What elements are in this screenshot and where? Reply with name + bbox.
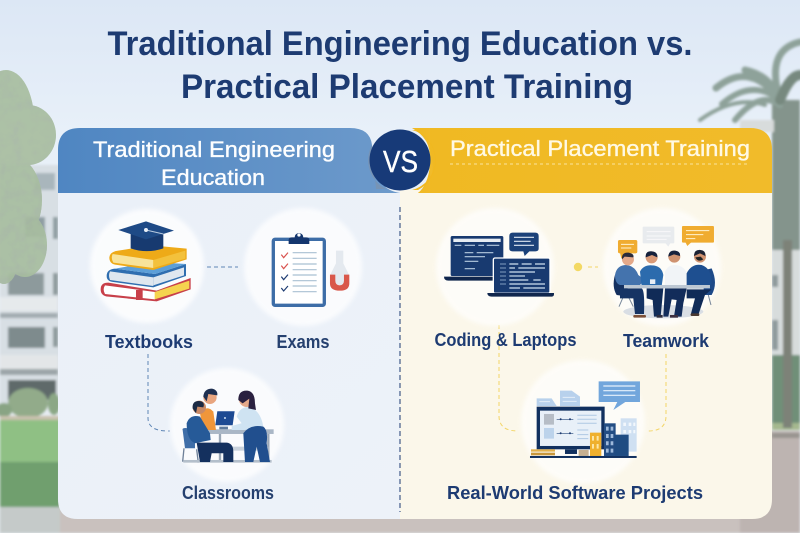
label: classrooms: Classrooms	[182, 483, 274, 503]
header: practical: Practical Placement Training	[450, 136, 750, 161]
icon: classroom group	[170, 368, 284, 482]
header: practical	[400, 128, 772, 193]
icon: coding laptops	[436, 208, 554, 326]
icon connectors: left	[148, 267, 238, 431]
label: exams: Exams	[276, 332, 330, 352]
label: coding and laptops: Coding & Laptops	[434, 330, 576, 350]
title: Practical Placement Training	[181, 68, 633, 106]
label: real-world software projects: Real-World Software Projects	[447, 483, 703, 503]
header: traditional	[58, 128, 400, 193]
label: teamwork: Teamwork	[623, 331, 710, 351]
panel: practical placement training	[400, 128, 772, 519]
icon: textbooks	[90, 209, 204, 323]
panel: traditional engineering education	[58, 128, 400, 519]
vs badge	[368, 130, 436, 190]
header: traditional: Traditional Engineering	[93, 137, 335, 162]
title: Traditional Engineering Education vs.	[108, 25, 692, 63]
foliage	[0, 70, 56, 284]
label: textbooks: Textbooks	[105, 332, 193, 352]
title	[108, 25, 692, 106]
header: traditional: Education	[161, 165, 265, 190]
icon connectors: right	[499, 267, 666, 431]
icon: real-world software project	[521, 360, 645, 484]
vs badge: VS	[383, 144, 418, 179]
center divider	[399, 207, 401, 512]
connector node	[574, 263, 582, 271]
icon: exams clipboard	[244, 208, 362, 326]
icon: teamwork	[603, 208, 721, 326]
